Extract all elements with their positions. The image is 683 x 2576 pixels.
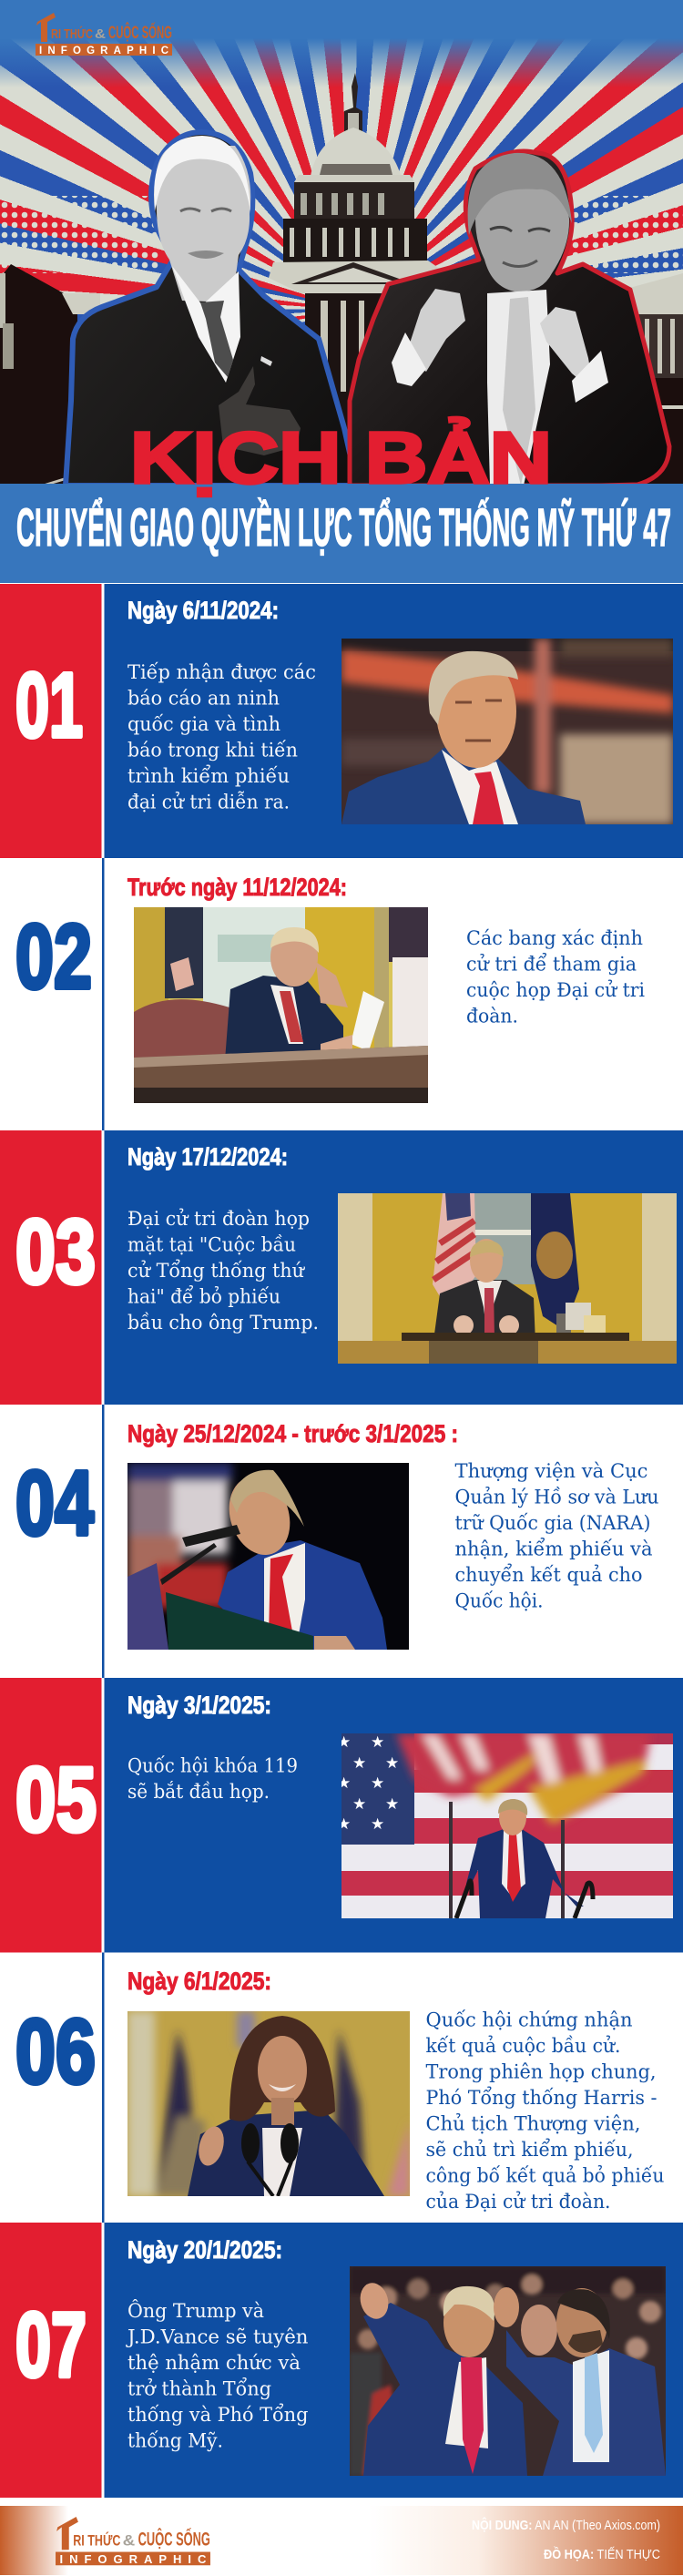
- number 06: 06: [15, 2000, 96, 2102]
- suit: [218, 1540, 387, 1650]
- blue title band: [0, 484, 683, 584]
- logo: Tri thức & Cuộc sống Infographic: [36, 13, 172, 56]
- timeline and footer: [0, 584, 683, 2575]
- body text: [127, 661, 316, 813]
- body text: Các bang xác định: [466, 927, 643, 949]
- microphone: [160, 1525, 240, 1585]
- panel: step 01: [0, 584, 683, 858]
- Biden facial features: [180, 209, 231, 211]
- stars: ★: [371, 1733, 384, 1751]
- Biden shirt: [172, 266, 240, 383]
- Biden hair: [154, 136, 250, 211]
- body text: [426, 2009, 665, 2213]
- number 02: 02: [15, 905, 92, 1007]
- body text: báo cáo an ninh: [127, 687, 280, 709]
- header illustration and titles: [0, 13, 683, 557]
- Trump right fist and forearm: [540, 307, 594, 392]
- number 07: 07: [15, 2294, 87, 2396]
- Biden lapel pin: [260, 356, 272, 366]
- suit: [188, 2110, 384, 2196]
- photo: Kamala Harris speaking: [127, 2011, 410, 2196]
- Trump left fist and forearm: [405, 289, 465, 372]
- Biden neck and face: [155, 146, 250, 302]
- Biden glove: [219, 366, 301, 455]
- desk frames: [556, 1314, 571, 1334]
- body text: đoàn.: [466, 1006, 518, 1027]
- body text: hai" để bỏ phiếu: [127, 1286, 280, 1308]
- background: blue fade over rays: [0, 0, 683, 91]
- body text: kết quả cuộc bầu cử.: [426, 2035, 621, 2057]
- Vance shirt: [573, 2350, 609, 2462]
- number 04: 04: [15, 1452, 94, 1554]
- eyes and mouth: [455, 700, 502, 741]
- body text: sẽ bắt đầu họp.: [127, 1781, 270, 1803]
- photo: Oval Office address: [338, 1193, 677, 1364]
- paper: [351, 991, 384, 1051]
- body text: Quản lý Hồ sơ và Lưu: [455, 1487, 659, 1508]
- head: [470, 1239, 503, 1283]
- body text: thống Mỹ.: [127, 2430, 223, 2452]
- body text: [126, 2299, 308, 2452]
- illustration: side wings: [0, 264, 683, 494]
- Trump face: [475, 173, 569, 291]
- stars: ★: [371, 1774, 384, 1792]
- Vance pointing hand: [494, 2287, 519, 2327]
- photo: Trump in front of flag: [337, 1733, 673, 1918]
- body text: [127, 1754, 298, 1803]
- photo: Trump on phone at desk: [134, 907, 428, 1103]
- body text: Đại cử tri đoàn họp: [127, 1208, 310, 1230]
- body text: Tiếp nhận được các: [127, 661, 316, 683]
- face: [258, 2036, 307, 2105]
- logo: Tri thức & Cuộc sống Infographic: RI THỨC: [51, 26, 93, 42]
- stars: [337, 1733, 399, 1833]
- body text: cử tri để tham gia: [466, 953, 637, 975]
- head: [219, 1468, 300, 1563]
- credit: graphics: ĐỒ HỌA: TIẾN THỰC: [544, 2546, 660, 2562]
- Trump hair: [468, 153, 572, 235]
- Trump facial features: [490, 227, 550, 231]
- Trump pointing hand: [356, 2280, 392, 2322]
- Biden tie: [200, 301, 233, 377]
- suit: [342, 748, 586, 824]
- shirt and tie: [502, 1831, 525, 1896]
- neck: [271, 2098, 294, 2125]
- logo: Tri thức & Cuộc sống Infographic: CUỘC SỐNG: [108, 23, 172, 43]
- logo: Tri thức & Cuộc sống Infographic: RI THỨC: [73, 2532, 120, 2550]
- shirt and tie: [442, 750, 518, 824]
- body text: trình kiểm phiếu: [127, 765, 290, 787]
- panel: footer: [0, 2506, 683, 2575]
- suit: [466, 1829, 584, 1918]
- panel: header poster: [0, 0, 683, 583]
- Trump tie: [503, 297, 535, 486]
- stars: ★: [337, 1733, 351, 1751]
- Trump tie: [461, 2357, 484, 2474]
- microphones: [241, 2123, 260, 2163]
- poles: [449, 1802, 453, 1918]
- US flag: [433, 1193, 476, 1312]
- number 01: 01: [15, 654, 83, 756]
- panel: step 02: [15, 858, 645, 1130]
- number 03: 03: [15, 1201, 96, 1303]
- sign: [127, 1563, 168, 1650]
- chair: [134, 999, 229, 1062]
- illustration: capitol building: [269, 73, 446, 485]
- body text: Quốc hội.: [455, 1590, 543, 1612]
- date: Trước ngày 11/12/2024:: [127, 874, 347, 901]
- body text: Quốc hội chứng nhận: [426, 2009, 632, 2031]
- hand: [195, 2123, 228, 2169]
- title: KỊCH BẢN: KỊCH BẢN: [130, 417, 552, 498]
- hair: [229, 2016, 335, 2121]
- photo: Trump and Vance pointing: [350, 2266, 666, 2476]
- logo: Tri thức & Cuộc sống Infographic: CUỘC SỐNG: [138, 2527, 210, 2550]
- body text: Phó Tổng thống Harris -: [426, 2087, 658, 2109]
- logo: Tri thức & Cuộc sống Infographic: &: [123, 2532, 135, 2550]
- body text: công bố kết quả bỏ phiếu: [426, 2164, 665, 2186]
- canton: [342, 1733, 414, 1845]
- head: [436, 655, 516, 768]
- Trump shirt: [487, 290, 550, 486]
- body text: Trong phiên họp chung,: [426, 2060, 656, 2082]
- stars: ★: [385, 1795, 399, 1813]
- stars: ★: [352, 1754, 366, 1772]
- photo: Trump at podium: [127, 1463, 409, 1650]
- panel: step 03: [0, 1130, 683, 1405]
- body text: Thượng viện và Cục: [455, 1460, 648, 1482]
- body text: Chủ tịch Thượng viện,: [426, 2113, 641, 2135]
- Trump right cuff: [572, 351, 608, 403]
- stars: ★: [385, 1754, 399, 1772]
- body text: Ông Trump và: [127, 2299, 264, 2322]
- Vance head: [556, 2288, 607, 2357]
- body text: trữ Quốc gia (NARA): [455, 1512, 650, 1534]
- shirt: [262, 2128, 302, 2196]
- illustration: Biden figure: [66, 132, 357, 486]
- background: sunburst rays left: [0, 0, 683, 383]
- body text: cuộc họp Đại cử tri: [466, 979, 645, 1001]
- panel: step 06: [15, 1953, 665, 2223]
- presidential flag: [531, 1193, 579, 1330]
- logo: Tri thức & Cuộc sống Infographic: [56, 2517, 210, 2566]
- head: [499, 1799, 526, 1835]
- logo: Tri thức & Cuộc sống Infographic: INFOGRAPHIC: [39, 46, 168, 56]
- photo: Trump portrait: [342, 639, 673, 824]
- head and hair: [270, 928, 318, 986]
- date: Ngày 6/11/2024:: [127, 597, 279, 624]
- blurred foreground flags: [396, 1733, 651, 1825]
- rails: [456, 1881, 593, 1918]
- date: Ngày 3/1/2025:: [127, 1692, 271, 1719]
- date: Ngày 25/12/2024 - trước 3/1/2025 :: [127, 1420, 458, 1447]
- suit: [225, 976, 343, 1060]
- Vance suit: [506, 2330, 666, 2476]
- body text: báo trong khi tiến: [127, 740, 298, 762]
- body text: J.D.Vance sẽ tuyên: [126, 2326, 308, 2348]
- background: sunburst rays right: [403, 40, 683, 288]
- phone arm: [316, 962, 348, 1007]
- body text: nhận, kiểm phiếu và: [455, 1538, 652, 1559]
- halftone dots left: [0, 196, 159, 273]
- Trump left cuff: [392, 332, 426, 386]
- body text: chuyển kết quả cho: [455, 1564, 643, 1586]
- body text: thệ nhậm chức và: [127, 2352, 301, 2374]
- date: Ngày 6/1/2025:: [127, 1968, 271, 1995]
- number 05: 05: [15, 1749, 97, 1851]
- body text: [127, 1208, 319, 1334]
- logo: Tri thức & Cuộc sống Infographic: &: [95, 26, 106, 42]
- halftone dots right: [569, 196, 683, 273]
- stars: ★: [337, 1815, 351, 1833]
- panel: step 04: [15, 1405, 659, 1678]
- panel: step 07: [0, 2223, 683, 2498]
- body text: quốc gia và tình: [127, 713, 280, 735]
- panel: step 05: [0, 1678, 683, 1953]
- body text: sẽ chủ trì kiểm phiếu,: [426, 2139, 634, 2161]
- body text: thống và Phó Tổng: [127, 2404, 308, 2426]
- Eric behind: [521, 2305, 557, 2356]
- illustration: Trump figure: [350, 151, 669, 486]
- desk: [134, 1046, 428, 1103]
- body text: Quốc hội khóa 119: [127, 1754, 298, 1776]
- stars: ★: [371, 1815, 384, 1833]
- body text: [466, 927, 645, 1027]
- date: Ngày 20/1/2025:: [127, 2236, 282, 2264]
- desk: [402, 1333, 629, 1341]
- podium: [166, 1592, 313, 1650]
- stars: ★: [337, 1774, 351, 1792]
- date: Ngày 17/12/2024:: [127, 1143, 288, 1170]
- Trump shirt: [445, 2357, 488, 2448]
- Trump head: [443, 2288, 494, 2357]
- logo: Tri thức & Cuộc sống Infographic: INFOGRAPHIC: [60, 2552, 207, 2566]
- hands: [454, 1315, 474, 1335]
- shirt and tie: [264, 1543, 305, 1650]
- man suit: [433, 1280, 535, 1344]
- stars: ★: [352, 1795, 366, 1813]
- body text: đại cử tri diễn ra.: [127, 791, 290, 813]
- body text: trở thành Tổng: [127, 2377, 271, 2399]
- body text: của Đại cử tri đoàn.: [426, 2191, 610, 2213]
- Vance tie: [585, 2353, 603, 2453]
- Trump suit: [363, 2303, 527, 2476]
- body text: mặt tại "Cuộc bầu: [127, 1233, 296, 1255]
- body text: bầu cho ông Trump.: [127, 1312, 319, 1334]
- body text: [455, 1460, 659, 1612]
- body text: cử Tổng thống thứ: [127, 1260, 305, 1282]
- credit: content: NỘI DUNG: AN AN (Theo Axios.com): [472, 2517, 660, 2533]
